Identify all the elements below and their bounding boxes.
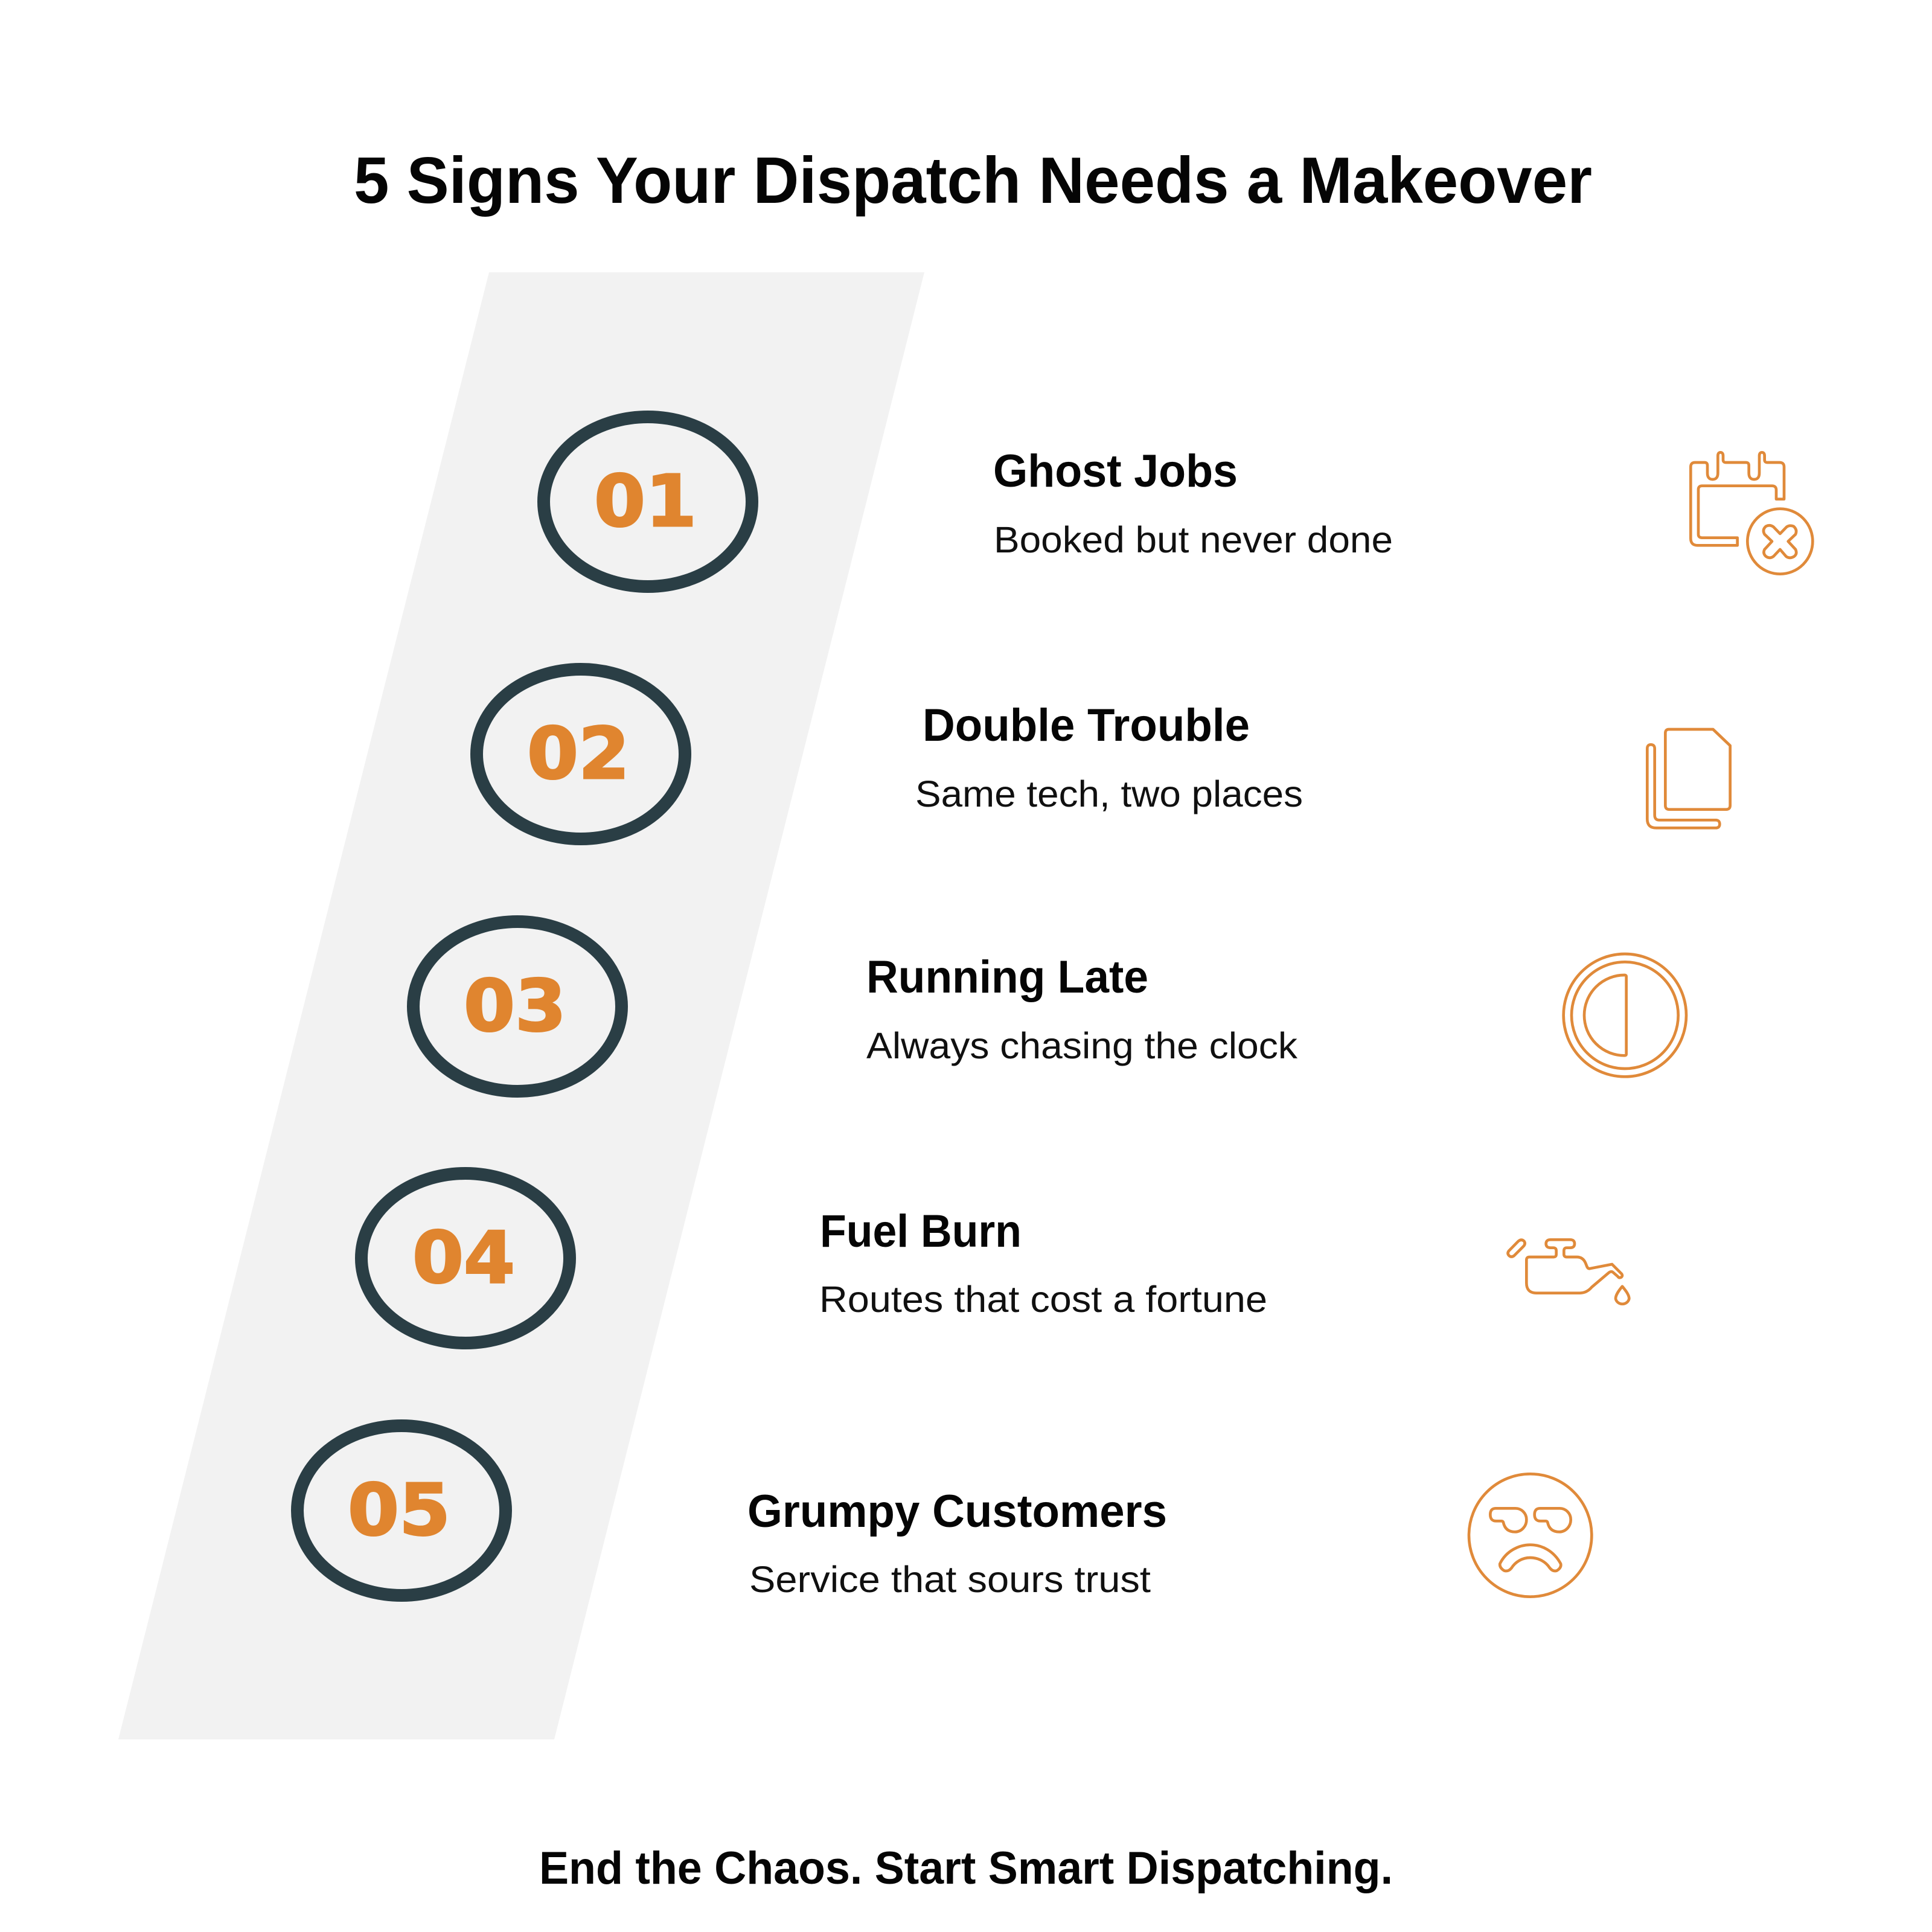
number 05: 05 bbox=[348, 1468, 450, 1552]
title: 5 Signs Your Dispatch Needs a Makeover bbox=[354, 144, 1592, 217]
icon: grumpy face bbox=[1469, 1474, 1591, 1597]
ring 04 bbox=[361, 1174, 570, 1343]
icon: calendar with cross bbox=[1690, 452, 1812, 574]
heading: Running Late: Running Late bbox=[866, 952, 1148, 1003]
heading: Ghost Jobs: Ghost Jobs bbox=[993, 446, 1238, 497]
description: Fuel Burn: Routes that cost a fortune bbox=[819, 1279, 1267, 1320]
step 03 badge bbox=[413, 921, 622, 1092]
heading: Grumpy Customers: Grumpy Customers bbox=[747, 1486, 1167, 1537]
icon: oil can with drop bbox=[1508, 1239, 1629, 1304]
text block: Ghost Jobs bbox=[993, 446, 1393, 560]
text block: Fuel Burn bbox=[819, 1206, 1267, 1320]
ring 03 bbox=[413, 921, 622, 1092]
description: Running Late: Always chasing the clock bbox=[866, 1025, 1298, 1066]
text block: Running Late bbox=[866, 952, 1298, 1066]
panel: slanted background band bbox=[118, 272, 924, 1739]
footer call to action: End the Chaos. Start Smart Dispatching. bbox=[539, 1843, 1393, 1894]
step 05 badge bbox=[297, 1426, 506, 1595]
step 02 badge bbox=[477, 669, 685, 839]
step 04 badge bbox=[361, 1174, 570, 1343]
number 01: 01 bbox=[594, 459, 697, 543]
ring 05 bbox=[297, 1426, 506, 1595]
heading: Fuel Burn: Fuel Burn bbox=[820, 1206, 1022, 1257]
ring 01 bbox=[543, 417, 752, 587]
ring 02 bbox=[477, 669, 685, 839]
description: Double Trouble: Same tech, two places bbox=[915, 773, 1303, 814]
heading: Double Trouble: Double Trouble bbox=[923, 700, 1250, 751]
description: Grumpy Customers: Service that sours trust bbox=[749, 1559, 1151, 1600]
step 01 badge bbox=[543, 417, 752, 587]
number 04: 04 bbox=[412, 1216, 515, 1299]
number 02: 02 bbox=[527, 712, 630, 795]
description: Ghost Jobs: Booked but never done bbox=[994, 519, 1393, 560]
icon: stacked documents bbox=[1647, 729, 1730, 828]
text block: Grumpy Customers bbox=[747, 1486, 1167, 1600]
text block: Double Trouble bbox=[915, 700, 1303, 814]
number 03: 03 bbox=[464, 964, 566, 1048]
icon: half clock bbox=[1564, 954, 1686, 1076]
